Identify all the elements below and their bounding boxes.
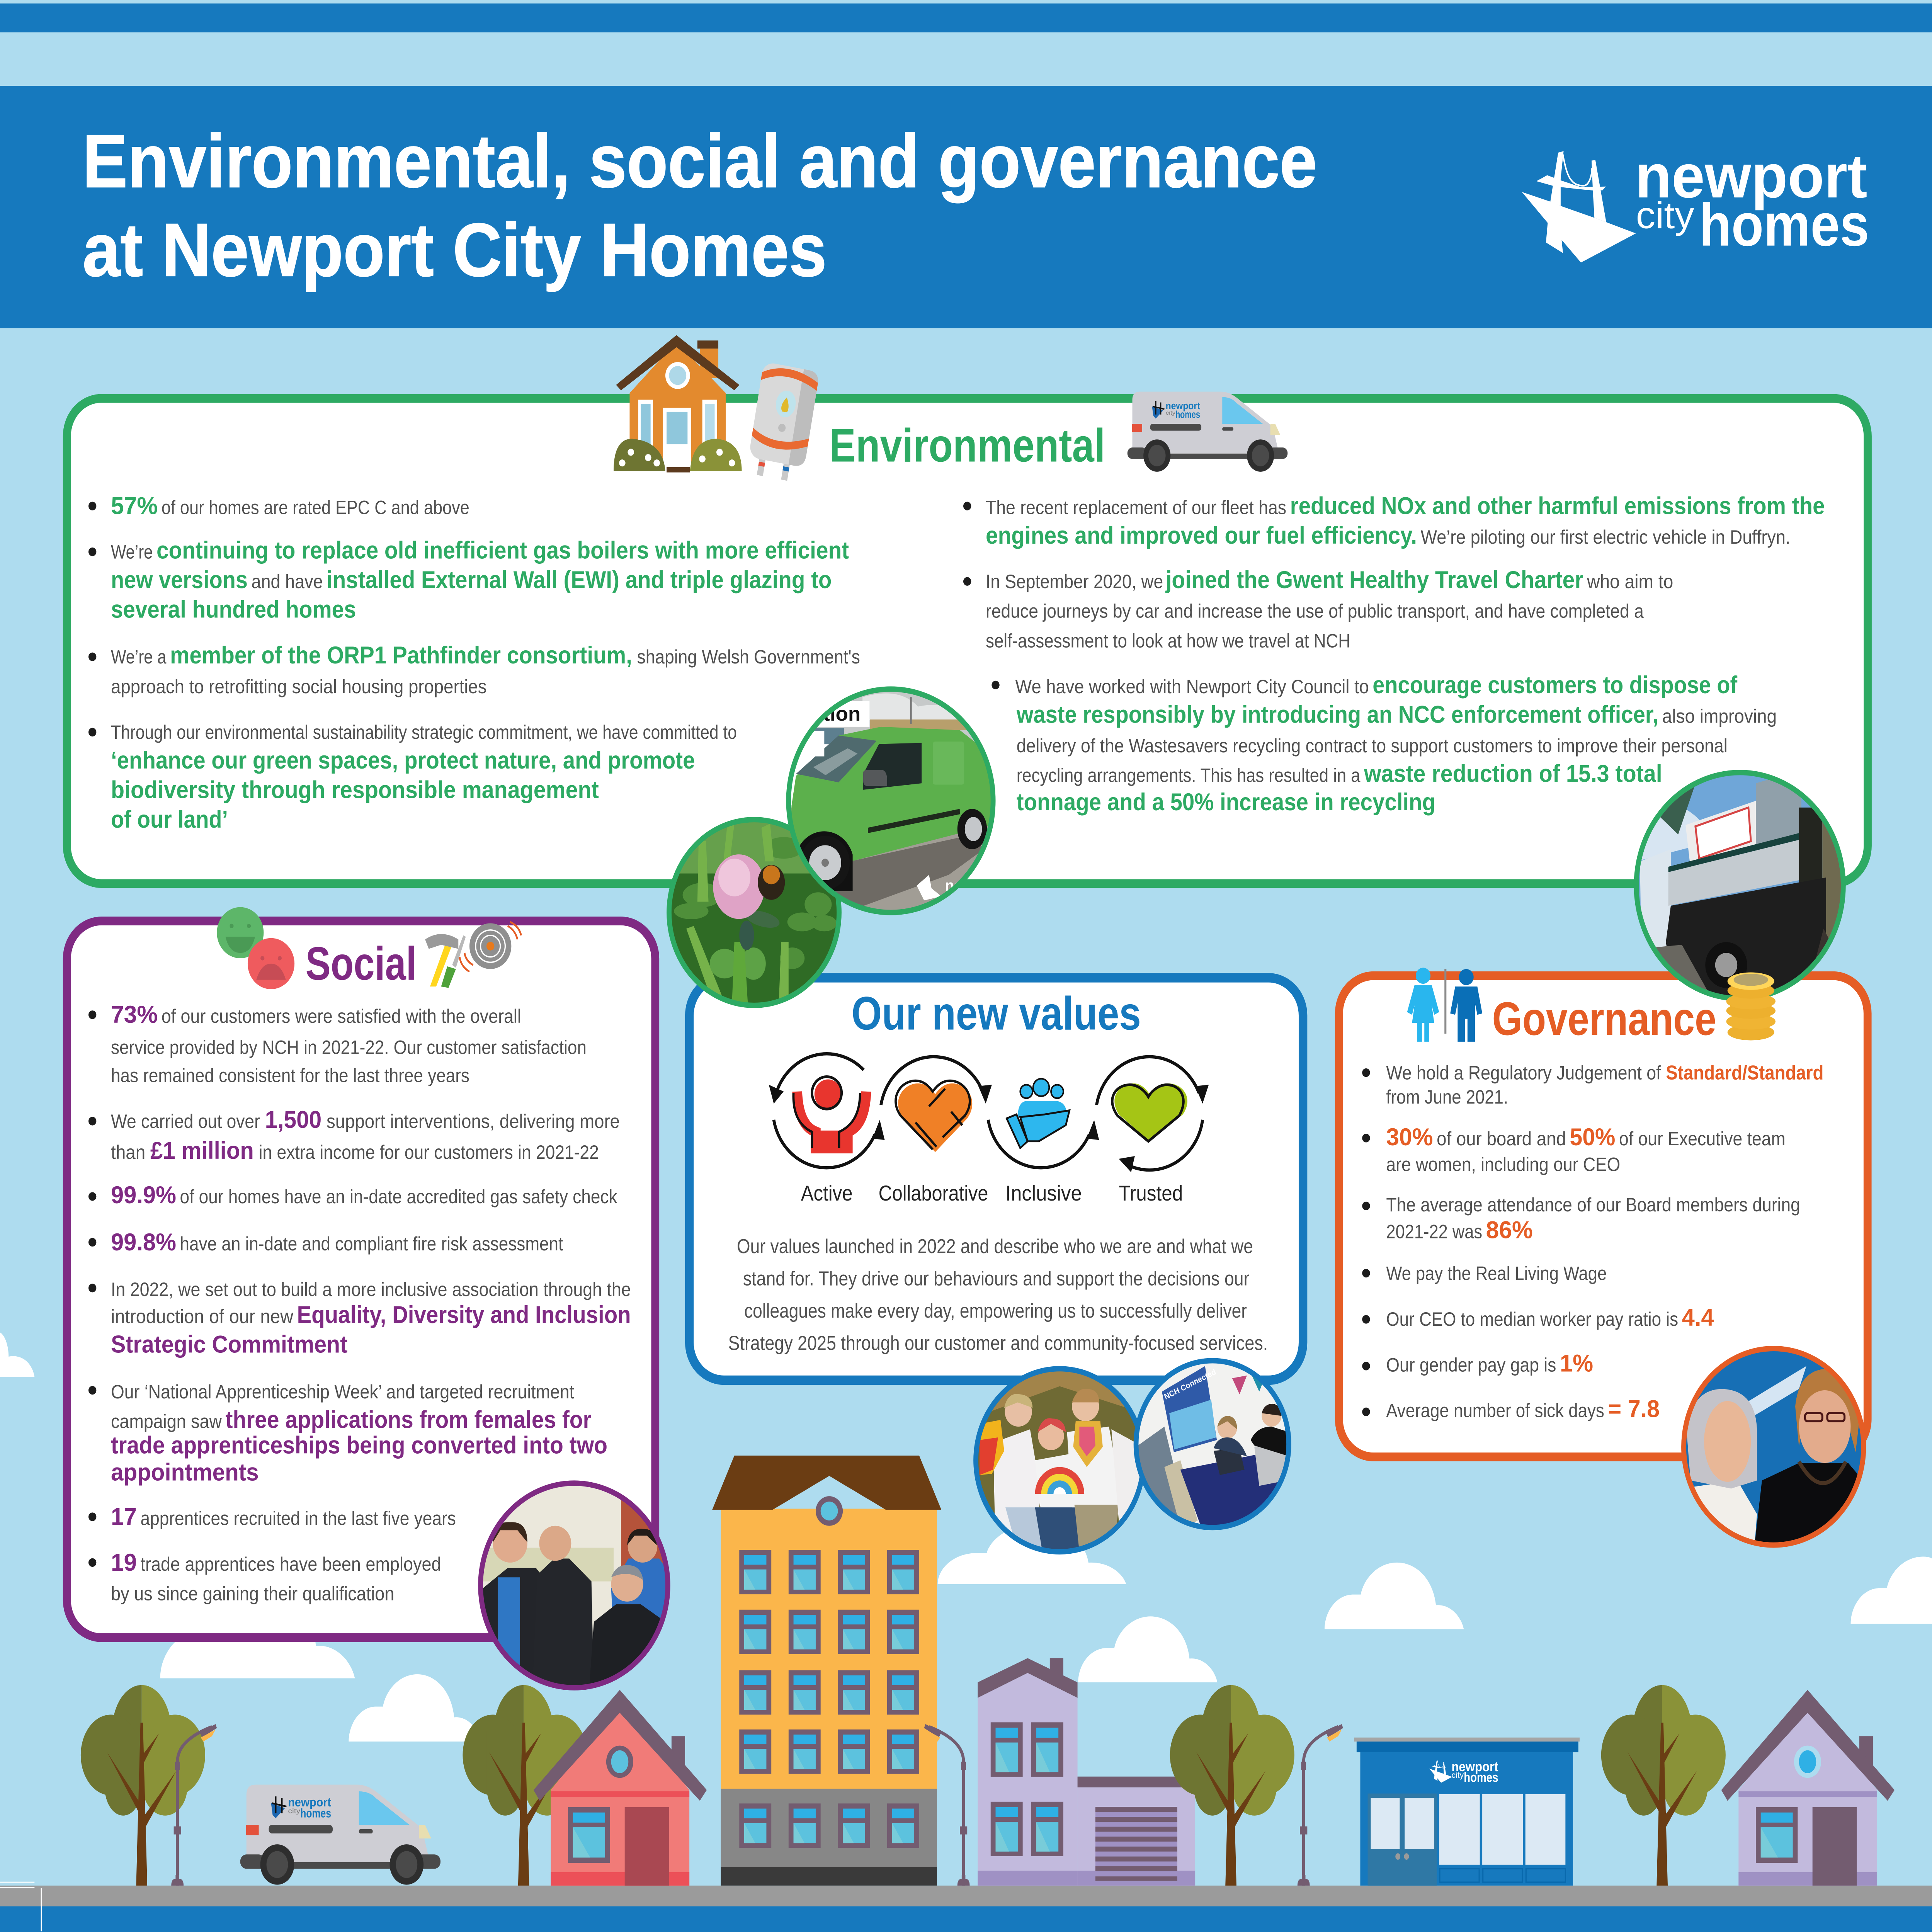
cloud: behind community photos xyxy=(938,1524,1126,1584)
icon: Collaborative xyxy=(881,1057,992,1152)
edge marks xyxy=(0,1882,34,1888)
text block: values description xyxy=(728,1235,1268,1354)
text block: values description: Our values launched in 2022 and describe who we are and what we xyxy=(737,1235,1253,1257)
bullet: travel charter: reduce journeys by car and increase the use of public transport, and have completed a xyxy=(986,600,1644,622)
panel: governance xyxy=(1339,976,1867,1457)
bullet: sick days xyxy=(1362,1395,1660,1422)
bullet: women on the board: are women, including our CEO xyxy=(1386,1153,1620,1175)
icon: company van xyxy=(1128,392,1287,472)
text block: values description: colleagues make every day, empowering us to successfully deliver xyxy=(744,1299,1247,1322)
bullet: regulatory judgement xyxy=(1362,1061,1823,1108)
photo: green electric van: tion xyxy=(823,702,861,725)
bullet: gas safety: of our homes have an in-date accredited gas safety check xyxy=(180,1186,617,1208)
cloud: far right xyxy=(1851,1557,1932,1624)
bullet: pay ratio: 4.4 xyxy=(1682,1304,1714,1331)
photo: apprentices group xyxy=(478,1482,670,1692)
bullet: replacing boilers: We’re xyxy=(111,541,153,563)
bullet: trade apprentices: trade apprentices have been employed xyxy=(141,1553,441,1575)
bullet: strategic commitment: biodiversity through responsible management xyxy=(111,776,599,803)
photo: green electric van: ne xyxy=(945,877,962,895)
bullet: regulatory judgement: Standard/Standard xyxy=(1666,1061,1823,1084)
bullet: waste and recycling: delivery of the Wastesavers recycling contract to support customers to improve their personal xyxy=(1017,735,1728,757)
bullet: waste and recycling: tonnage and a 50% increase in recycling xyxy=(1017,789,1435,815)
icon: Inclusive xyxy=(988,1079,1099,1168)
illustration: lilac house right xyxy=(1721,1690,1895,1886)
label: Trusted: Trusted xyxy=(1119,1182,1183,1205)
shop logo: city xyxy=(1451,1771,1464,1780)
shop logo: newport xyxy=(1451,1760,1498,1774)
bullet: gender pay gap: 1% xyxy=(1560,1350,1593,1377)
label: Inclusive: Inclusive xyxy=(1005,1182,1082,1205)
bullet: waste and recycling: waste responsibly by introducing an NCC enforcement officer, xyxy=(1016,701,1658,728)
illustration: bottom van xyxy=(240,1785,440,1885)
bullet: ORP1 Pathfinder xyxy=(88,642,860,697)
bullet: fleet replacement: engines and improved our fuel efficiency. xyxy=(986,522,1417,549)
cloud: left of second tree xyxy=(349,1674,481,1742)
illustration: tall apartment building xyxy=(712,1456,941,1886)
bullet: support interventions xyxy=(88,1106,620,1164)
bullet: fleet replacement: We’re piloting our first electric vehicle in Duffryn. xyxy=(1421,526,1790,548)
cloud: centre xyxy=(1078,1616,1218,1682)
text block: values description: stand for. They drive our behaviours and support the decisions our xyxy=(743,1267,1249,1290)
illustration: bottom van: homes xyxy=(300,1806,331,1820)
photo: two women xyxy=(1683,1349,1864,1545)
bullet: replacing boilers: and have xyxy=(252,571,323,593)
top band xyxy=(0,3,1932,32)
bullet: travel charter: self-assessment to look at how we travel at NCH xyxy=(986,630,1350,652)
icon: green happy face xyxy=(217,907,264,958)
bullet: ORP1 Pathfinder: We’re a xyxy=(111,646,167,668)
bullet: waste and recycling: encourage customers to dispose of xyxy=(1372,671,1738,698)
bullet: apprenticeship week: appointments xyxy=(111,1459,259,1486)
icon: red sad face xyxy=(248,938,294,989)
bullet: fire risk xyxy=(88,1228,563,1255)
text block: environmental left column xyxy=(88,492,860,833)
illustration: bottom van: city xyxy=(288,1807,301,1815)
illustration: blue Newport City Homes shop xyxy=(1354,1738,1580,1886)
bullet: EDI commitment: introduction of our new xyxy=(111,1306,294,1327)
title: at Newport City Homes xyxy=(83,208,827,292)
bullet: customer satisfaction: has remained consistent for the last three years xyxy=(111,1065,469,1087)
bullet: support interventions: in extra income for our customers in 2021-22 xyxy=(259,1141,599,1163)
bullet: support interventions: 1,500 xyxy=(265,1106,321,1133)
logo: Newport City Homes: homes xyxy=(1699,191,1869,259)
bullet: ORP1 Pathfinder: member of the ORP1 Pathfinder consortium, xyxy=(170,642,632,669)
bullet: apprenticeship week: three applications from females for xyxy=(226,1406,592,1433)
bullet: apprentices recruited: 17 xyxy=(111,1503,137,1530)
bullet: board attendance: 86% xyxy=(1486,1216,1533,1243)
bullet: EDI commitment: Equality, Diversity and Inclusion xyxy=(297,1301,631,1328)
bullet: waste and recycling: We have worked with Newport City Council to xyxy=(1015,676,1369,697)
bullet: fleet replacement: The recent replacement of our fleet has xyxy=(986,497,1286,519)
icon: company van: city xyxy=(1166,410,1176,416)
bullet: strategic commitment: ‘enhance our green spaces, protect nature, and promote xyxy=(111,747,695,774)
illustration: lilac house with garage xyxy=(978,1658,1195,1886)
bullet: support interventions: than xyxy=(111,1141,145,1163)
cloud: left edge xyxy=(0,1332,34,1377)
icon: Trusted xyxy=(1097,1057,1209,1172)
bullet: trade apprentices: 19 xyxy=(111,1549,137,1576)
bullet: apprenticeship week: campaign saw xyxy=(111,1411,222,1432)
bullet: board attendance: 2021-22 was xyxy=(1386,1221,1482,1243)
text block: environmental right column xyxy=(963,492,1825,815)
icon: company van: newport xyxy=(1166,400,1200,412)
bullet: ORP1 Pathfinder: shaping Welsh Government's xyxy=(637,646,860,668)
bullet: waste and recycling: recycling arrangements. This has resulted in a xyxy=(1017,765,1360,786)
bullet: replacing boilers: installed External Wall (EWI) and triple glazing to xyxy=(327,566,832,594)
bullet: fleet replacement: reduced NOx and other harmful emissions from the xyxy=(1290,492,1825,519)
shop logo xyxy=(1429,1760,1498,1785)
bullet: regulatory judgement: We hold a Regulatory Judgement of xyxy=(1386,1062,1661,1084)
illustration: pink house xyxy=(534,1690,707,1886)
bullet: women on the board: of our board and xyxy=(1437,1128,1566,1150)
panel: our new values xyxy=(689,978,1303,1380)
bullet: EDI commitment: In 2022, we set out to build a more inclusive association through the xyxy=(111,1279,631,1301)
bullet: EDI commitment xyxy=(88,1279,631,1358)
bullet: replacing boilers: new versions xyxy=(111,566,248,594)
logo: Newport City Homes: city xyxy=(1636,194,1694,236)
bullet: EDI commitment: Strategic Commitment xyxy=(111,1331,347,1358)
icon: Active xyxy=(769,1054,885,1168)
bullet: waste and recycling: also improving xyxy=(1662,706,1777,727)
bullet: pay ratio: Our CEO to median worker pay ratio is xyxy=(1386,1308,1678,1330)
bullet: customer satisfaction: of our customers were satisfied with the overall xyxy=(162,1005,521,1027)
logo: Newport City Homes: newport xyxy=(1635,141,1867,211)
heading: Environmental: Environmental xyxy=(829,419,1105,472)
bullet: travel charter: In September 2020, we xyxy=(986,571,1163,593)
bullet: women on the board xyxy=(1362,1124,1786,1175)
bullet: board attendance: The average attendance of our Board members during xyxy=(1386,1194,1800,1216)
label: Active: Active xyxy=(801,1182,853,1205)
bullet: strategic commitment: of our land’ xyxy=(111,806,228,833)
bullet: gas safety: 99.9% xyxy=(111,1182,176,1208)
bullet: strategic commitment: Through our environmental sustainability strategic commitment, we have committed to xyxy=(111,721,737,743)
bullet: apprentices recruited xyxy=(88,1503,456,1530)
icon: company van: homes xyxy=(1175,409,1200,420)
cloud: under social panel xyxy=(160,1588,355,1678)
bullet: EPC ratings: 57% xyxy=(111,492,158,519)
bullet: women on the board: of our Executive team xyxy=(1619,1128,1786,1150)
illustration: tree 1 xyxy=(81,1685,205,1886)
bullet: fire risk: 99.8% xyxy=(111,1228,176,1255)
heading: Social: Social xyxy=(306,937,417,990)
title xyxy=(83,119,1317,292)
bullet: strategic commitment xyxy=(88,721,737,833)
text block: values description: Strategy 2025 through our customer and community-focused services. xyxy=(728,1332,1268,1354)
cloud: middle right xyxy=(1325,1563,1464,1629)
bullet: EPC ratings xyxy=(88,492,469,519)
bullet: gas safety xyxy=(88,1182,617,1208)
bullet: apprenticeship week xyxy=(88,1381,607,1486)
bullet: replacing boilers: continuing to replace old inefficient gas boilers with more efficient xyxy=(156,537,849,564)
illustration: street lamp 3 xyxy=(1298,1724,1343,1886)
photo: NCH Connected stall: NCH Connected xyxy=(1163,1367,1217,1401)
bullet: trade apprentices: by us since gaining their qualification xyxy=(111,1583,394,1605)
illustration: street lamp 1 xyxy=(171,1724,217,1886)
illustration: tree 4 xyxy=(1601,1685,1726,1886)
panel: environmental xyxy=(67,335,1868,884)
bullet: sick days: Average number of sick days xyxy=(1386,1400,1604,1422)
icon: woman and man figures xyxy=(1407,968,1482,1042)
bullet: fire risk: have an in-date and compliant fire risk assessment xyxy=(180,1233,563,1255)
photo: NCH Connected stall xyxy=(1136,1361,1289,1527)
icon: boiler xyxy=(746,362,820,483)
bullet: apprenticeship week: Our ‘National Apprenticeship Week’ and targeted recruitment xyxy=(111,1381,574,1403)
bullet: EPC ratings: of our homes are rated EPC C and above xyxy=(162,497,469,519)
bullet: gender pay gap: Our gender pay gap is xyxy=(1386,1354,1556,1376)
heading: Governance: Governance xyxy=(1492,992,1716,1045)
bullet: customer satisfaction: service provided by NCH in 2021-22. Our customer satisfaction xyxy=(111,1036,587,1058)
bullet: sick days: = 7.8 xyxy=(1608,1395,1660,1422)
icon: brick house xyxy=(614,335,742,473)
photo: green electric van xyxy=(789,689,996,915)
shop logo: homes xyxy=(1464,1770,1498,1785)
heading: Our new values: Our new values xyxy=(851,987,1141,1040)
bullet: regulatory judgement: from June 2021. xyxy=(1386,1086,1508,1108)
bullet: waste and recycling xyxy=(992,671,1777,815)
illustration: street lamp 2 xyxy=(924,1724,970,1886)
bullet: travel charter: joined the Gwent Healthy Travel Charter xyxy=(1165,566,1583,594)
text block: social bullets xyxy=(88,1001,631,1605)
bullet: real living wage: We pay the Real Living Wage xyxy=(1386,1263,1607,1284)
label: Collaborative: Collaborative xyxy=(879,1182,988,1205)
bullet: trade apprentices xyxy=(88,1549,441,1605)
photo: waste enforcement truck xyxy=(1636,770,1845,1000)
bullet: apprenticeship week: trade apprenticeships being converted into two xyxy=(111,1432,607,1459)
photo: bee on clover xyxy=(669,820,839,1005)
bottom band xyxy=(0,1906,1932,1932)
bullet: customer satisfaction xyxy=(88,1001,587,1087)
road xyxy=(0,1886,1932,1906)
illustration: tree 2 xyxy=(463,1685,587,1886)
photo: rainbow celebration group xyxy=(976,1369,1143,1552)
bullet: board attendance xyxy=(1362,1194,1800,1243)
bullet: waste and recycling: waste reduction of 15.3 total xyxy=(1364,760,1662,787)
bullet: fleet replacement xyxy=(963,492,1825,549)
bullet: support interventions: We carried out over xyxy=(111,1111,260,1132)
bullet: travel charter xyxy=(963,566,1673,652)
bullet: ORP1 Pathfinder: approach to retrofitting social housing properties xyxy=(111,676,487,697)
bullet: customer satisfaction: 73% xyxy=(111,1001,158,1028)
illustration: tree 3 xyxy=(1170,1685,1294,1886)
text block: governance bullets xyxy=(1362,1061,1823,1422)
icon: stack of gold coins xyxy=(1726,973,1776,1040)
panel: social xyxy=(67,907,655,1638)
logo: Newport City Homes xyxy=(1522,141,1869,263)
bullet: support interventions: £1 million xyxy=(150,1137,254,1164)
header banner xyxy=(0,86,1932,328)
bullet: replacing boilers xyxy=(88,537,849,623)
bullet: gender pay gap xyxy=(1362,1350,1593,1377)
bullet: replacing boilers: several hundred homes xyxy=(111,596,356,623)
bullet: women on the board: 30% xyxy=(1386,1124,1433,1151)
illustration: bottom van: newport xyxy=(288,1795,331,1810)
bullet: support interventions: support interventions, delivering more xyxy=(327,1111,620,1132)
bullet: travel charter: who aim to xyxy=(1587,571,1673,593)
icon: hammer and screwdriver xyxy=(425,934,466,988)
title: Environmental, social and governance xyxy=(83,119,1317,203)
icon: smoke alarm xyxy=(459,922,521,972)
bullet: women on the board: 50% xyxy=(1570,1124,1615,1151)
bullet: apprentices recruited: apprentices recruited in the last five years xyxy=(141,1508,456,1529)
